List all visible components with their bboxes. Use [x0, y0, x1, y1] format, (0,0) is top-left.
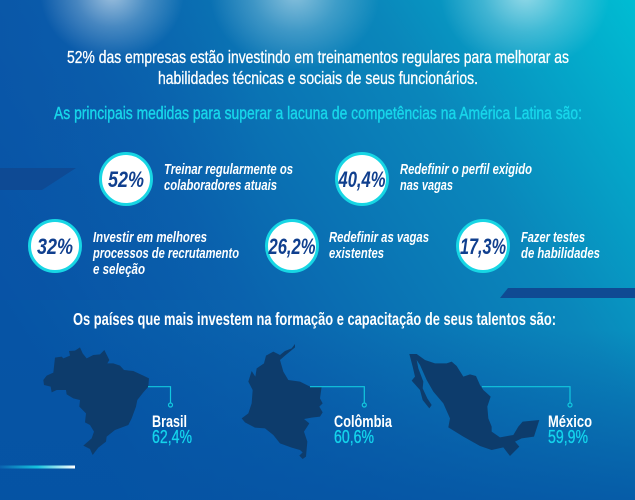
measure: 26,2% [266, 220, 429, 272]
decorative bar right [500, 288, 635, 298]
measure: 26,2%: 26,2% [268, 234, 316, 259]
decorative parallelogram left [0, 168, 76, 190]
measure: 52%: colaboradores atuais [164, 177, 277, 194]
connector: Mexico [482, 387, 572, 407]
measure: 17,3%: de habilidades [521, 245, 600, 262]
measure: 17,3%: Fazer testes [521, 229, 585, 246]
country: México [409, 354, 592, 456]
label: Colômbia 60,6%: Colômbia [334, 412, 392, 431]
measure: 40,4%: Redefinir o perfil exigido [400, 161, 532, 178]
connector: Colombia [310, 387, 366, 407]
label: Brasil 62,4%: Brasil [152, 412, 187, 431]
country: Colômbia [242, 344, 392, 459]
measure: 32%: Investir em melhores [93, 229, 207, 246]
label: México 59,9% [548, 412, 592, 447]
label: México 59,9%: México [548, 412, 592, 431]
label: México 59,9%: 59,9% [548, 427, 588, 447]
map: Colombia [242, 344, 323, 459]
measure: 52%: 52% [108, 167, 144, 192]
measure: 26,2%: Redefinir as vagas [329, 229, 429, 246]
label: Colômbia 60,6%: 60,6% [334, 427, 374, 447]
country: Brasil [43, 347, 192, 455]
measure: 17,3%: 17,3% [460, 234, 506, 259]
measure: 40,4% [336, 154, 532, 204]
measure: 32%: e seleção [93, 261, 145, 278]
measure: 26,2%: existentes [329, 245, 384, 262]
label: Colômbia 60,6% [334, 412, 392, 447]
label: Brasil 62,4% [152, 412, 192, 447]
measure: 40,4%: nas vagas [400, 177, 453, 194]
map: Brazil [43, 347, 149, 455]
measure: 32%: 32% [37, 234, 73, 259]
intro text [67, 47, 569, 88]
map: Mexico [409, 354, 539, 456]
decorative glowing bar bottom left [0, 466, 75, 468]
measure: 32% [30, 220, 239, 278]
measure: 17,3% [458, 220, 600, 272]
intro text: habilidades técnicas e sociais de seus funcionários. [158, 68, 478, 88]
measure: 32%: processos de recrutamento [92, 245, 239, 262]
measure: 52%: Treinar regularmente os [164, 161, 293, 178]
measure: 52% [100, 154, 293, 204]
connector: Brazil [148, 387, 172, 407]
measure: 40,4%: 40,4% [338, 167, 386, 192]
label: Brasil 62,4%: 62,4% [152, 427, 192, 447]
